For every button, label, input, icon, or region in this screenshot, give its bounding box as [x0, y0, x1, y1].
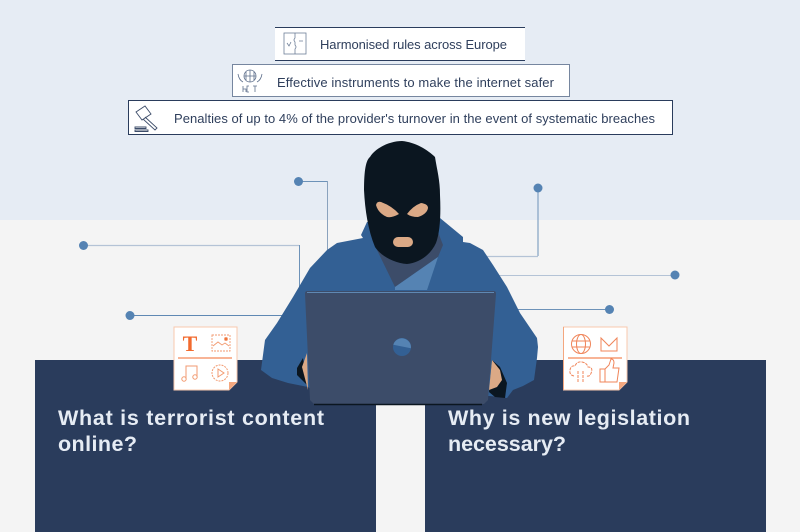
right hand — [489, 360, 502, 390]
laptop logo — [393, 338, 411, 356]
right glove — [489, 360, 507, 398]
icon: play — [212, 365, 228, 381]
card: online channels icons — [564, 327, 627, 390]
jacket — [261, 218, 538, 398]
heading: why is new legislation necessary: necessary? — [448, 432, 566, 456]
left glove — [297, 358, 307, 385]
background: lower band — [0, 220, 800, 532]
callout: effective instruments — [232, 64, 570, 96]
icon: gavel — [135, 106, 157, 132]
balaclava — [364, 141, 440, 264]
icon: cloud transfer — [570, 362, 592, 382]
left hand — [302, 353, 308, 390]
icon: image — [212, 335, 230, 351]
heading: what is terrorist content online: online? — [58, 432, 137, 456]
background: upper band — [0, 0, 800, 220]
icon: globe — [572, 334, 590, 354]
icon: text: T — [183, 331, 198, 356]
connector lines and nodes — [79, 177, 680, 320]
icon: globe with hands — [238, 70, 262, 92]
text: effective instruments: Effective instruments to make the internet safer — [277, 75, 555, 90]
icon: puzzle — [284, 33, 306, 54]
text: penalties: Penalties of up to 4% of the provider's turnover in the event of systematic breaches — [174, 111, 656, 126]
icon: music note — [182, 366, 197, 381]
collar shadow — [377, 232, 443, 287]
callout: harmonised rules — [275, 27, 525, 61]
figure: masked hacker with laptop — [261, 141, 538, 404]
eye left — [376, 202, 399, 217]
icon: envelope — [601, 338, 617, 351]
text: harmonised rules: Harmonised rules across Europe — [320, 37, 507, 52]
panel: what is terrorist content online — [35, 360, 376, 532]
heading: what is terrorist content online: What is terrorist content — [58, 406, 324, 430]
icon: thumbs up — [600, 359, 619, 382]
shirt — [395, 257, 438, 290]
laptop — [305, 291, 496, 404]
panel: why is new legislation necessary — [425, 360, 766, 532]
mouth — [393, 237, 413, 247]
callout: penalties — [128, 100, 672, 134]
eye right — [407, 203, 428, 217]
heading: why is new legislation necessary: Why is new legislation — [448, 406, 690, 430]
card: content types icons — [174, 327, 237, 390]
